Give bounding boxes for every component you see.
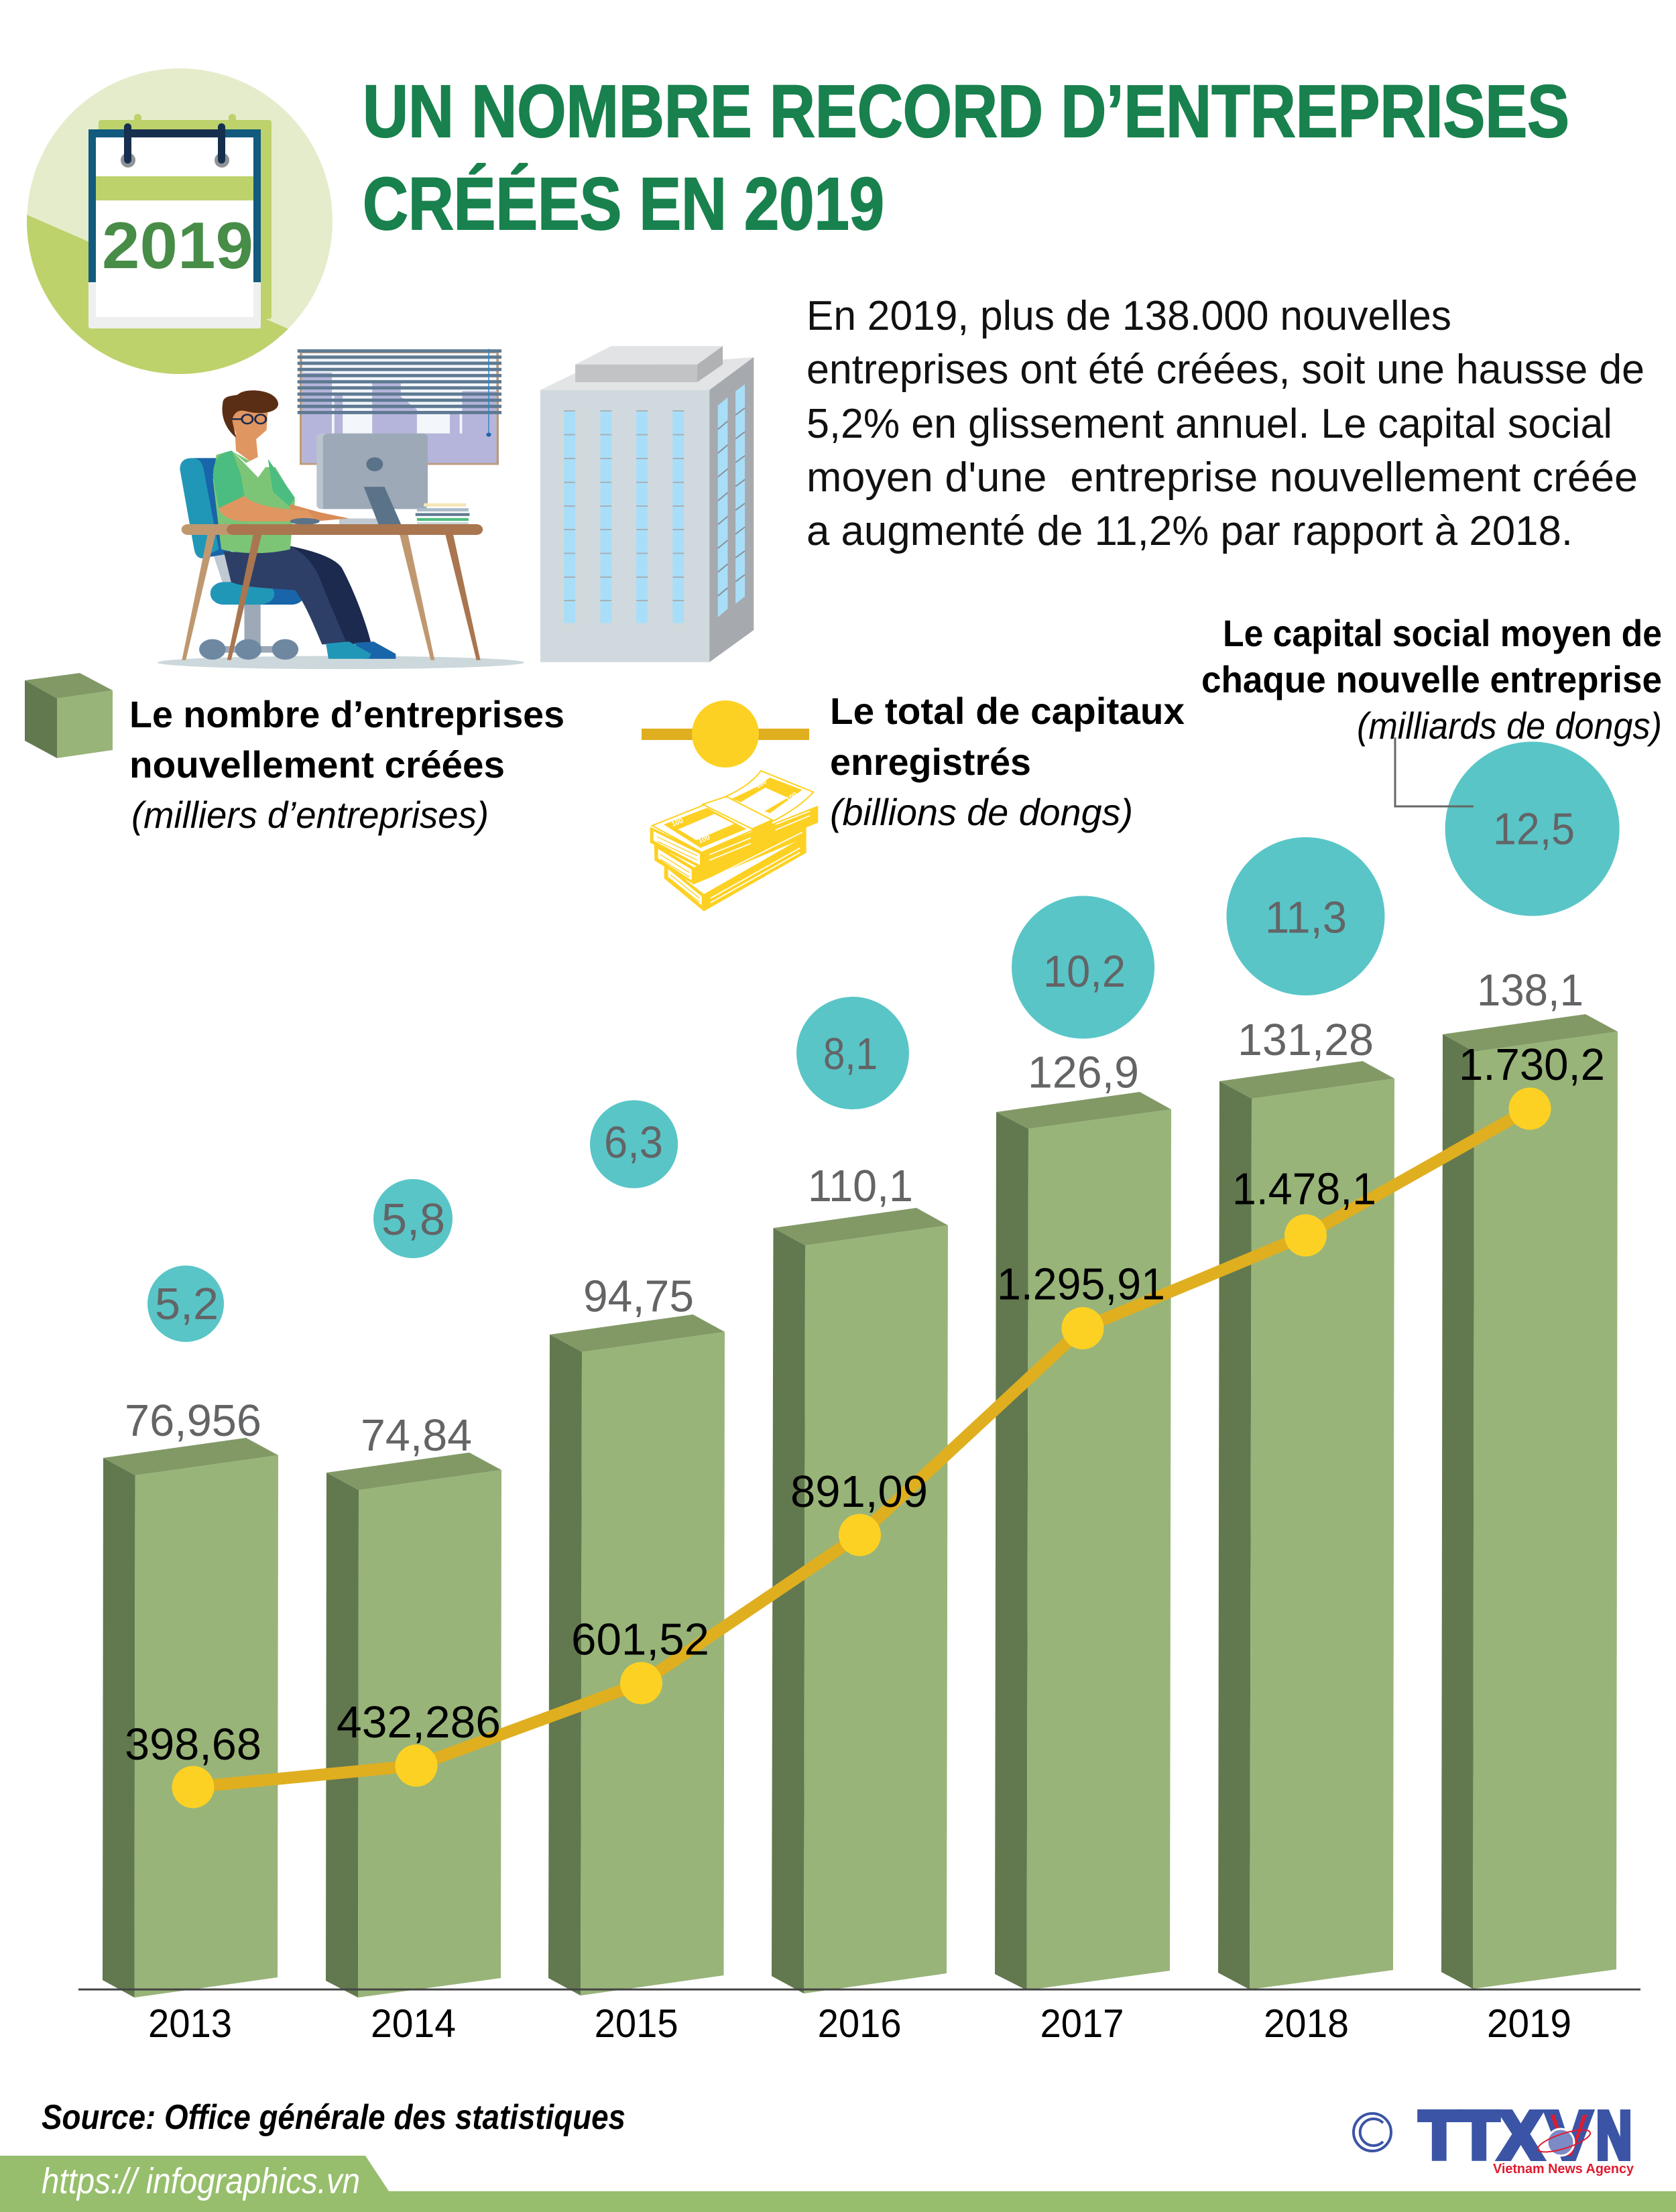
bubble 2016 bbox=[796, 997, 909, 1109]
icon: stack of banknotes: 100 bbox=[670, 816, 684, 828]
legend text: capital: Le total de capitaux bbox=[830, 690, 1185, 732]
bubble 2014 bbox=[373, 1179, 453, 1258]
legend text: capital bbox=[830, 690, 1185, 833]
legend: average capital: (milliards de dongs) bbox=[1357, 704, 1662, 747]
legend: average capital: chaque nouvelle entreprise bbox=[1201, 658, 1662, 700]
capital value labels: 601,52 bbox=[571, 1615, 709, 1665]
capital value labels: 891,09 bbox=[790, 1467, 928, 1517]
desk bbox=[182, 524, 483, 660]
icon: stack of banknotes bbox=[651, 771, 817, 910]
copyright symbol bbox=[1354, 2113, 1391, 2151]
enterprise value labels: 74,84 bbox=[361, 1410, 472, 1461]
window with blinds bbox=[298, 349, 501, 464]
footer band bbox=[0, 2156, 1676, 2212]
axis line bbox=[78, 1988, 1640, 1991]
legend: number of enterprises bbox=[25, 673, 564, 836]
line chart: total capital bbox=[172, 1087, 1551, 1808]
legend: total capital bbox=[642, 690, 1185, 910]
title: CRÉÉES EN 2019 bbox=[363, 163, 884, 245]
legend text: enterprises: (milliers d’entreprises) bbox=[131, 794, 489, 836]
bar 2013 bbox=[103, 1438, 278, 1998]
logo: TTXVN: N bbox=[1596, 2098, 1632, 2173]
bubble 2017 bbox=[1012, 896, 1154, 1039]
capital value labels bbox=[125, 1040, 1605, 1770]
bubble 2017: 10,2 bbox=[1043, 946, 1126, 997]
bubble 2019 bbox=[1445, 741, 1620, 916]
icon: line marker bbox=[642, 700, 809, 767]
bubble 2016: 8,1 bbox=[823, 1029, 878, 1079]
legend text: enterprises: nouvellement créées bbox=[129, 743, 505, 786]
bubble 2013 bbox=[147, 1266, 224, 1342]
intro paragraph: entreprises ont été créées, soit une hausse de bbox=[806, 347, 1644, 393]
enterprise value labels: 138,1 bbox=[1477, 965, 1583, 1016]
books bbox=[416, 503, 469, 524]
legend text: enterprises: Le nombre d’entreprises bbox=[129, 693, 564, 735]
illustration: person working at desk bbox=[158, 349, 524, 669]
bar 2017 bbox=[995, 1092, 1171, 1990]
legend text: capital: (billions de dongs) bbox=[830, 791, 1133, 833]
intro paragraph: a augmenté de 11,2% par rapport à 2018. bbox=[806, 508, 1573, 554]
enterprise value labels: 76,956 bbox=[125, 1396, 261, 1446]
capital value labels: 432,286 bbox=[337, 1697, 501, 1747]
title bbox=[363, 70, 1569, 245]
intro paragraph: 5,2% en glissement annuel. Le capital social bbox=[806, 401, 1612, 447]
year axis labels: 2018 bbox=[1264, 2002, 1349, 2046]
enterprise value labels: 131,28 bbox=[1238, 1015, 1374, 1065]
capital value labels: 398,68 bbox=[125, 1719, 261, 1770]
enterprise value labels: 94,75 bbox=[583, 1271, 694, 1322]
bubble 2018 bbox=[1227, 837, 1385, 995]
legend text: capital: enregistrés bbox=[830, 741, 1031, 783]
legend: average capital bbox=[1201, 612, 1662, 747]
capital value labels: 1.478,1 bbox=[1232, 1164, 1376, 1215]
icon: calendar 2019 in circle bbox=[27, 68, 333, 374]
bar 2014 bbox=[326, 1453, 501, 1998]
icon: green cube bbox=[25, 673, 113, 758]
logo: TTXVN: TTX bbox=[1419, 2098, 1543, 2173]
intro paragraph: moyen d'une entreprise nouvellement créée bbox=[806, 454, 1638, 501]
connector line from legend to bubble bbox=[1395, 737, 1474, 806]
teal bubbles: average capital per year bbox=[147, 741, 1620, 1342]
capital value labels: 1.730,2 bbox=[1459, 1040, 1605, 1090]
intro paragraph: En 2019, plus de 138.000 nouvelles bbox=[806, 293, 1451, 339]
computer bbox=[316, 434, 428, 525]
enterprise value labels: 126,9 bbox=[1028, 1047, 1139, 1098]
year axis labels: 2013 bbox=[148, 2002, 232, 2046]
bar 2018 bbox=[1218, 1061, 1394, 1989]
bubble 2018: 11,3 bbox=[1265, 893, 1347, 942]
year axis labels: 2017 bbox=[1040, 2002, 1124, 2046]
person bbox=[213, 390, 396, 659]
bubble 2014: 5,8 bbox=[381, 1194, 445, 1245]
legend text: enterprises bbox=[129, 693, 564, 836]
year axis labels: 2016 bbox=[818, 2002, 902, 2046]
enterprise value labels bbox=[125, 965, 1583, 1461]
illustration: office building bbox=[540, 346, 754, 662]
bubble 2015 bbox=[590, 1100, 678, 1188]
calendar year: 2019 bbox=[102, 208, 253, 282]
source note: Source: Office générale des statistiques bbox=[42, 2098, 625, 2137]
enterprise value labels: 110,1 bbox=[808, 1161, 913, 1211]
year axis labels: 2015 bbox=[595, 2002, 678, 2046]
bubble 2019: 12,5 bbox=[1493, 804, 1575, 855]
capital value labels: 1.295,91 bbox=[997, 1259, 1165, 1310]
chair bbox=[180, 458, 305, 660]
bubble 2013: 5,2 bbox=[155, 1279, 219, 1329]
bar 2015 bbox=[548, 1314, 725, 1995]
website url: https:// infographics.vn bbox=[42, 2161, 360, 2201]
logo: TTXVN bbox=[1354, 2098, 1634, 2176]
bubble 2015: 6,3 bbox=[604, 1117, 663, 1168]
icon: stack of banknotes: 100 bbox=[755, 778, 768, 790]
icon: stack of banknotes: 100 bbox=[784, 791, 799, 804]
bar 2016 bbox=[772, 1208, 948, 1993]
year axis labels: 2014 bbox=[371, 2002, 456, 2046]
intro paragraph bbox=[806, 293, 1644, 554]
bar 2019 bbox=[1441, 1014, 1618, 1989]
logo: TTXVN: Vietnam News Agency bbox=[1493, 2162, 1634, 2176]
icon: stack of banknotes: 100 bbox=[697, 833, 711, 845]
year axis labels: 2019 bbox=[1487, 2002, 1571, 2046]
year axis labels bbox=[148, 2002, 1571, 2046]
bar chart: enterprises per year bbox=[103, 1014, 1618, 1998]
logo: TTXVN: V bbox=[1546, 2098, 1592, 2173]
